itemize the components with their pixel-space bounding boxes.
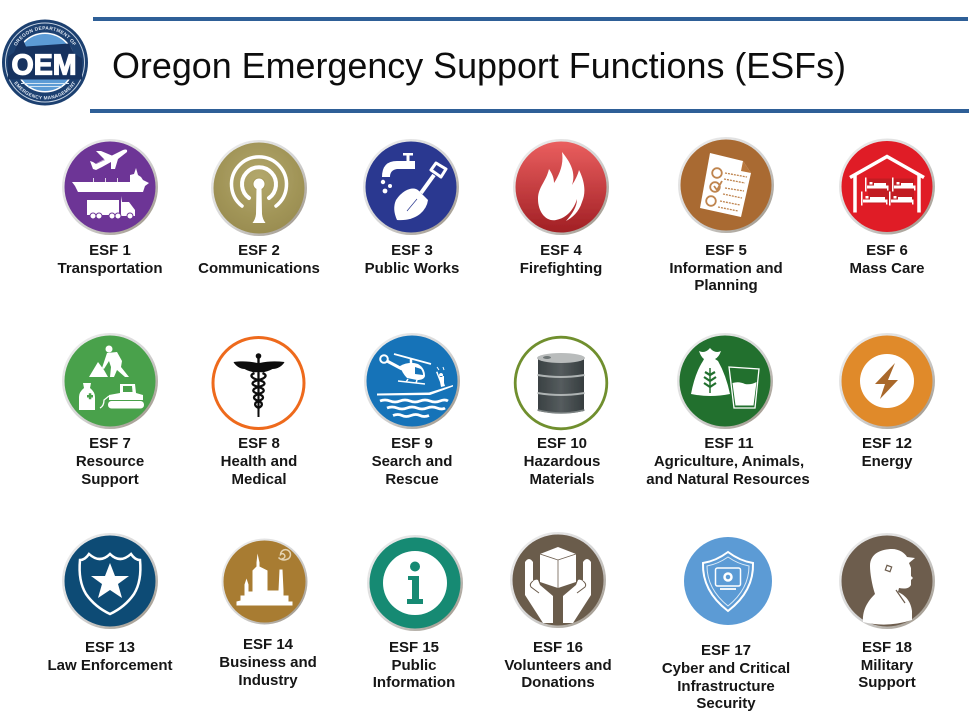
label: ESF 7: Resource [76, 453, 144, 470]
label: ESF 11: and Natural Resources [646, 471, 810, 488]
panel: ESF 8 [213, 338, 304, 488]
icon: plane, ship and truck [62, 139, 158, 235]
label: ESF 16: Volunteers and [504, 657, 612, 674]
icon: antenna [211, 140, 307, 236]
panel: ESF 7 [62, 333, 158, 488]
label: ESF 15: Information [373, 674, 455, 691]
label: ESF 2: ESF 2 [238, 242, 280, 259]
icon: city skyline and factory [222, 538, 308, 624]
icon: flame [513, 139, 609, 235]
label: ESF 11: ESF 11 [704, 435, 754, 452]
label: ESF 15: ESF 15 [389, 639, 439, 656]
icon: grain sack and glass of water [677, 333, 773, 429]
panel: ESF 6 [839, 138, 935, 277]
icon: hands holding box [510, 532, 606, 628]
panel: ESF 9 [364, 333, 460, 488]
label: ESF 4: ESF 4 [540, 242, 582, 259]
header rule bottom [90, 109, 969, 113]
label: ESF 3: Public Works [365, 260, 459, 277]
label: ESF 4: Firefighting [520, 260, 602, 277]
label: ESF 13: Law Enforcement [47, 657, 173, 674]
logo: OEM seal [2, 20, 88, 106]
label: ESF 17: Security [696, 695, 756, 712]
panel: ESF 12 [839, 333, 935, 470]
icon: faucet and shovel [363, 139, 459, 235]
icon: cyber security shield [684, 537, 772, 625]
panel: ESF 17 [662, 537, 790, 712]
label: ESF 17: Cyber and Critical [662, 660, 790, 677]
icon: police shield [62, 533, 158, 629]
label: ESF 10: ESF 10 [537, 435, 587, 452]
label: ESF 6: Mass Care [849, 260, 925, 277]
label: ESF 18: Support [858, 674, 916, 691]
label: ESF 14: Industry [238, 672, 298, 689]
label: ESF 9: Rescue [385, 471, 439, 488]
label: ESF 15: Public [391, 657, 437, 674]
panel: ESF 11 [646, 333, 810, 488]
label: ESF 13: ESF 13 [85, 639, 135, 656]
panel: ESF 15 [367, 535, 463, 691]
icon: information symbol [367, 535, 463, 631]
icon: worker, supply bag and bulldozer [62, 333, 158, 429]
label: ESF 18: Military [861, 657, 914, 674]
icon: helicopter water rescue [364, 333, 460, 429]
panel: ESF 5 [669, 137, 783, 294]
label: ESF 8: Medical [231, 471, 287, 488]
title: Oregon Emergency Support Functions (ESFs) [112, 45, 846, 86]
label: ESF 6: ESF 6 [866, 242, 908, 259]
panel: ESF 10 [515, 337, 607, 488]
logo: OEM seal: OEM [12, 50, 76, 82]
panel: ESF 1 [57, 139, 163, 277]
panel: ESF 16 [504, 532, 612, 691]
label: ESF 9: Search and [372, 453, 452, 470]
panel: ESF 13 [47, 533, 173, 674]
panel: ESF 14 [219, 538, 317, 689]
label: ESF 16: ESF 16 [533, 639, 583, 656]
icon: checklist document [678, 137, 774, 233]
label: ESF 16: Donations [521, 674, 595, 691]
header rule top [93, 17, 968, 21]
label: ESF 14: Business and [219, 654, 317, 671]
label: ESF 8: ESF 8 [238, 435, 280, 452]
panel: ESF 4 [513, 139, 609, 277]
label: ESF 11: Agriculture, Animals, [654, 453, 804, 470]
label: ESF 1: Transportation [57, 260, 163, 277]
label: ESF 10: Hazardous [524, 453, 600, 470]
label: ESF 14: ESF 14 [243, 636, 294, 653]
icon: caduceus [213, 338, 304, 428]
label: ESF 10: Materials [529, 471, 595, 488]
label: ESF 12: ESF 12 [862, 435, 912, 452]
label: ESF 12: Energy [862, 453, 913, 470]
label: ESF 9: ESF 9 [391, 435, 433, 452]
label: ESF 18: ESF 18 [862, 639, 912, 656]
label: ESF 17: Infrastructure [677, 678, 775, 695]
label: ESF 7: ESF 7 [89, 435, 131, 452]
panel: ESF 2 [198, 140, 320, 277]
panel: ESF 18 [839, 533, 935, 691]
label: ESF 1: ESF 1 [89, 242, 131, 259]
icon: soldier silhouette [839, 533, 935, 629]
icon: shelter with beds [839, 138, 935, 234]
label: ESF 5: Information and [669, 260, 783, 277]
label: ESF 3: ESF 3 [391, 242, 433, 259]
icon: lightning bolt [839, 333, 935, 429]
label: ESF 8: Health and [221, 453, 297, 470]
logo: OEM seal: EMERGENCY MANAGEMENT [14, 81, 75, 100]
icon: hazardous drum [515, 337, 607, 429]
label: ESF 17: ESF 17 [701, 642, 751, 659]
label: ESF 5: ESF 5 [705, 242, 747, 259]
label: ESF 5: Planning [694, 277, 758, 294]
logo: OEM seal: OREGON DEPARTMENT OF [14, 26, 76, 46]
label: ESF 7: Support [81, 471, 139, 488]
label: ESF 2: Communications [198, 260, 320, 277]
panel: ESF 3 [363, 139, 459, 277]
